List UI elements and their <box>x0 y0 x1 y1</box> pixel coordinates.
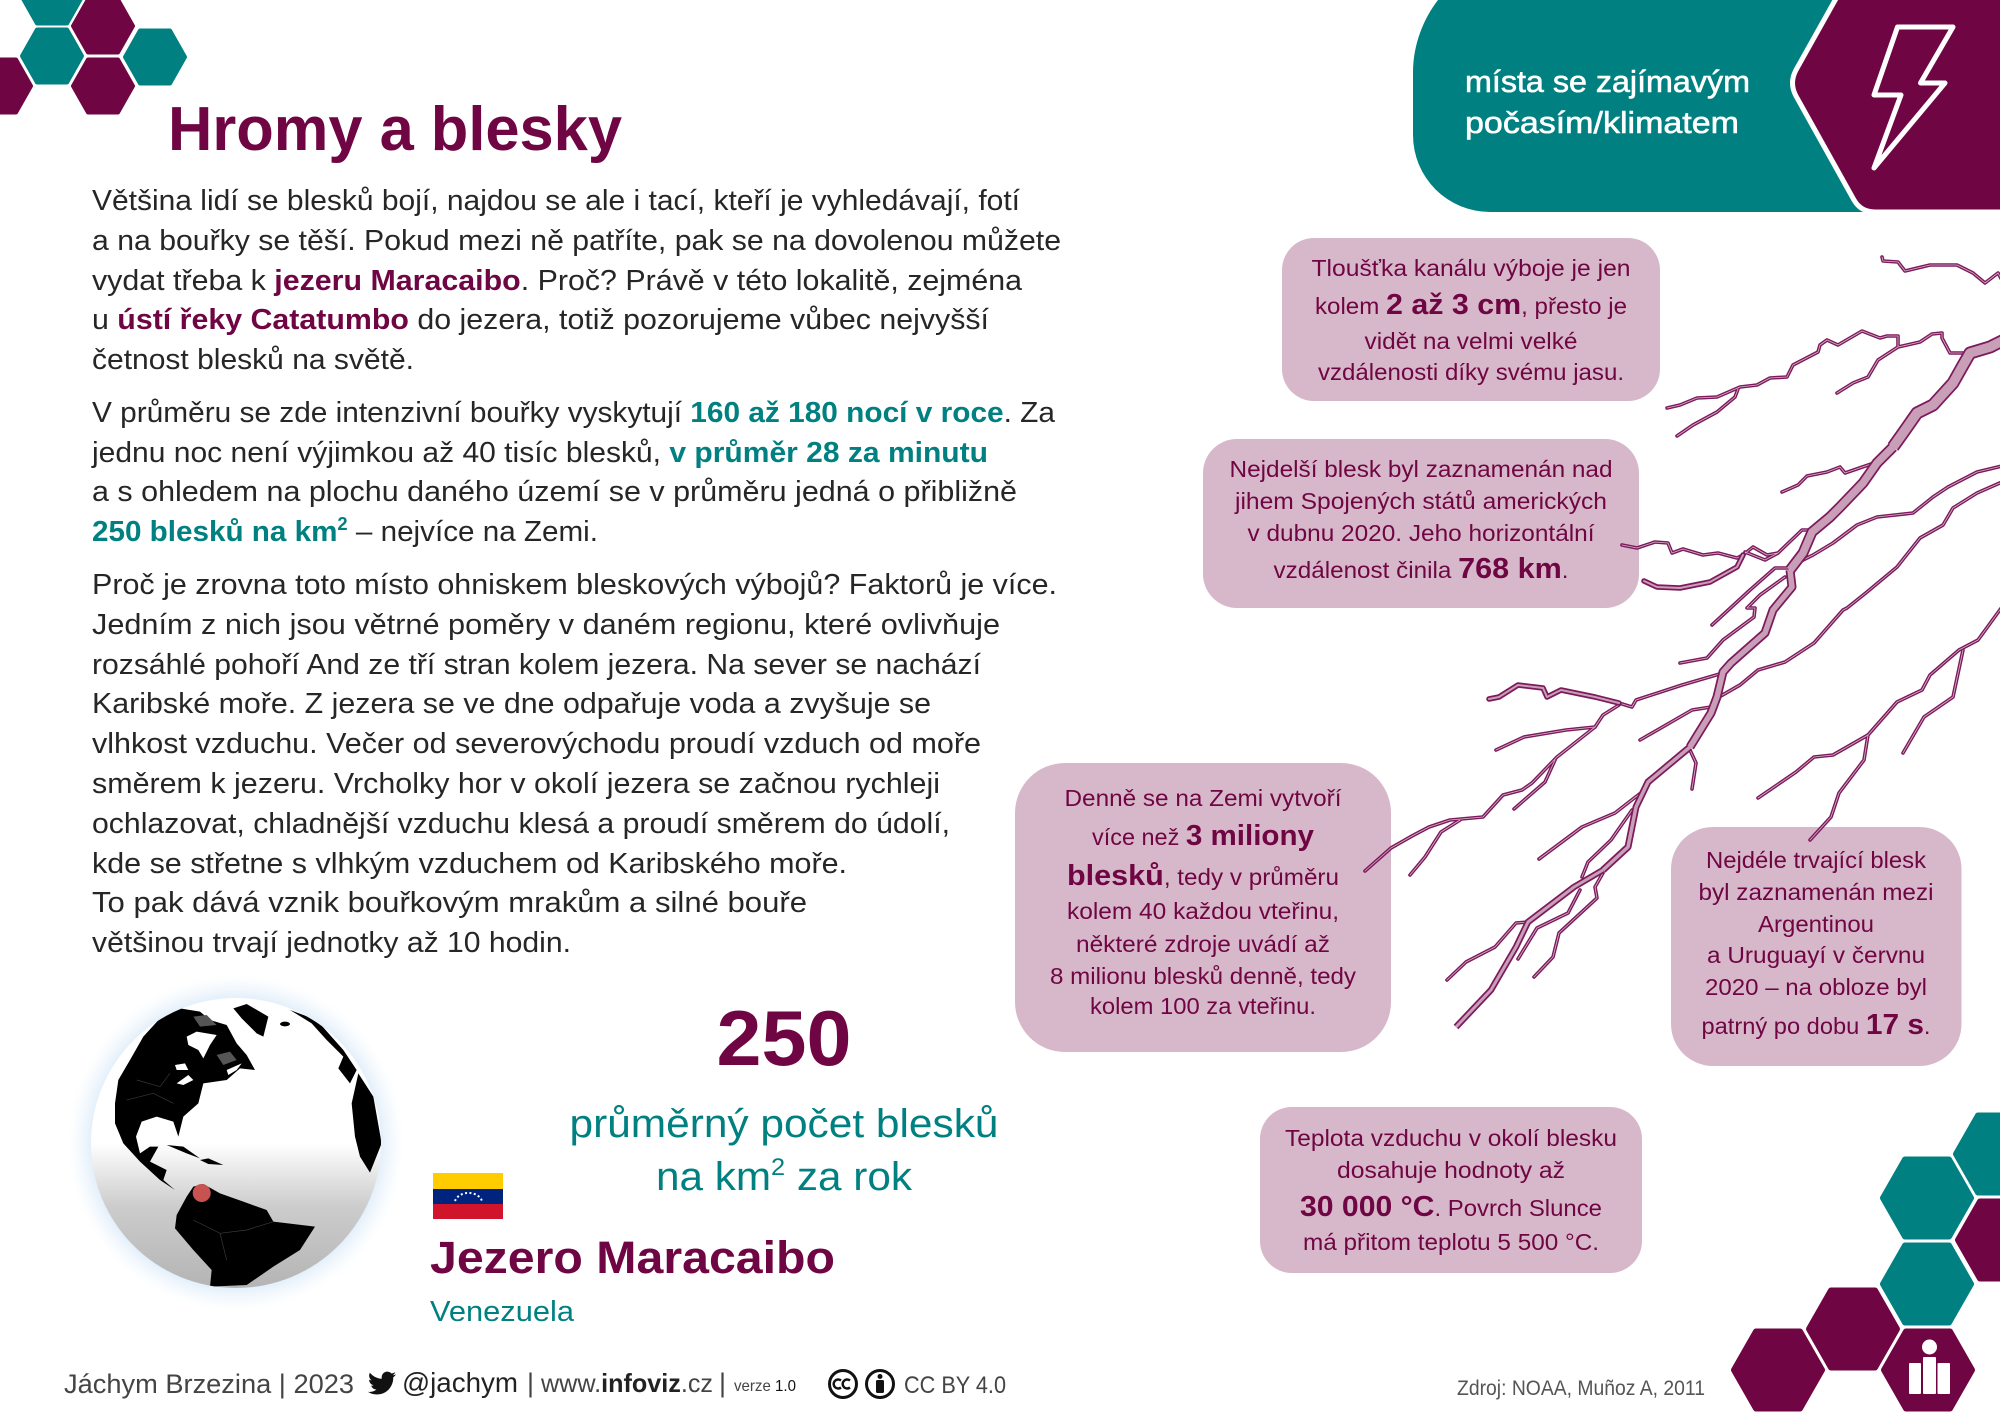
footer: credits: @jachym <box>402 1367 518 1398</box>
text block: intro paragraph: vydat třeba k jezeru Maracaibo . Proč? Právě v této lokalitě, zejména <box>92 265 1023 297</box>
text block: storm statistics paragraph: – nejvíce na Zemi. <box>348 516 598 548</box>
key number caption: 2 <box>771 1154 785 1181</box>
text block: storm statistics paragraph: jednu noc není výjimkou až 40 tisíc blesků, v průměr 28 za minutu <box>91 437 988 469</box>
fact box: daily lightning count: 8 milionu blesků denně, tedy <box>1050 963 1357 989</box>
text block: causes paragraph: Jedním z nich jsou větrné poměry v daném regionu, které ovlivňuje <box>92 609 1000 641</box>
fact box: daily lightning count: Denně se na Zemi vytvoří <box>1064 785 1342 811</box>
fact box: channel thickness: kolem 2 až 3 cm , přesto je <box>1315 289 1627 321</box>
fact box: daily lightning count: více než 3 miliony <box>1092 820 1314 852</box>
footer: credits <box>64 1367 1006 1399</box>
text block: storm statistics paragraph: a s ohledem na plochu daného území se v průměru jedná o přibližně <box>92 476 1017 508</box>
fact box: longest lightning: jihem Spojených států amerických <box>1234 488 1607 514</box>
title: Hromy a blesky <box>168 95 623 164</box>
key number: 250 <box>570 994 998 1199</box>
fact box: channel thickness: Tloušťka kanálu výboje je jen <box>1312 255 1630 281</box>
fact box: temperature: dosahuje hodnoty až <box>1337 1157 1565 1183</box>
icon: Creative Commons CC <box>830 1370 856 1398</box>
fact box: temperature: Teplota vzduchu v okolí blesku <box>1285 1125 1617 1151</box>
fact box: longest duration: 2020 – na obloze byl <box>1705 974 1927 1000</box>
fact box: channel thickness <box>1282 238 1660 401</box>
fact box: daily lightning count: kolem 100 za vteřinu. <box>1090 993 1316 1019</box>
fact box: temperature: 30 000 °C. Povrch Slunce <box>1300 1191 1602 1223</box>
fact box: temperature: má přitom teplotu 5 500 °C. <box>1303 1229 1599 1255</box>
fact box: channel thickness: vidět na velmi velké <box>1364 328 1578 354</box>
fact box: daily lightning count <box>1015 763 1391 1052</box>
text block: causes paragraph: směrem k jezeru. Vrcholky hor v okolí jezera se začnou rychleji <box>92 768 940 800</box>
fact box: longest duration: byl zaznamenán mezi <box>1698 879 1934 905</box>
footer: credits: Jáchym Brzezina | 2023 <box>64 1369 354 1399</box>
category label <box>1465 64 1750 140</box>
fact box: longest duration <box>1671 827 1962 1066</box>
map marker <box>193 1184 211 1202</box>
text block: causes paragraph <box>92 569 1057 959</box>
header banner: category <box>1413 0 2000 212</box>
country name: Venezuela <box>430 1296 575 1328</box>
flag of Venezuela <box>433 1173 503 1219</box>
hexagon with info icon <box>1884 1332 1972 1408</box>
footer: credits: | <box>527 1368 534 1398</box>
text block: intro paragraph: u ústí řeky Catatumbo do jezera, totiž pozorujeme vůbec nejvyšší <box>92 304 989 336</box>
text block: causes paragraph: To pak dává vznik bouřkovým mrakům a silné bouře <box>92 887 807 919</box>
text block: storm statistics paragraph: 250 blesků na km <box>92 516 337 548</box>
text block: causes paragraph: ochlazovat, chladnější vzduchu klesá a proudí směrem do údolí, <box>92 808 950 840</box>
text block: intro paragraph: četnost blesků na světě. <box>92 344 414 376</box>
hexagons: top left decoration <box>0 0 185 112</box>
fact box: longest lightning: Nejdelší blesk byl zaznamenán nad <box>1230 456 1612 482</box>
key number caption <box>570 1102 998 1199</box>
text block: intro paragraph <box>92 185 1061 376</box>
fact box: longest lightning <box>1203 439 1639 608</box>
text block: causes paragraph: rozsáhlé pohoří And ze tří stran kolem jezera. Na sever se nachází <box>92 649 981 681</box>
text block: storm statistics paragraph <box>91 397 1056 548</box>
key number caption: za rok <box>785 1155 913 1199</box>
lightning illustration <box>1365 257 2000 1027</box>
text block: intro paragraph: Většina lidí se blesků bojí, najdou se ale i tací, kteří je vyhledávají, fotí <box>92 185 1020 217</box>
fact box: channel thickness: vzdálenosti díky svému jasu. <box>1318 359 1624 385</box>
fact box: daily lightning count: blesků, tedy v průměru <box>1067 860 1339 892</box>
place name: Jezero Maracaibo <box>430 1232 835 1283</box>
footer: credits: www.infoviz.cz <box>540 1368 713 1398</box>
footer: credits: verze 1.0 <box>734 1378 796 1395</box>
hexagons: bottom right decoration <box>1734 1116 2000 1408</box>
purple hexagon badge <box>1792 0 2000 212</box>
fact box: daily lightning count: kolem 40 každou vteřinu, <box>1067 898 1339 924</box>
source note: Zdroj: NOAA, Muñoz A, 2011 <box>1457 1377 1705 1400</box>
text block: storm statistics paragraph: 2 <box>337 514 348 534</box>
text block: storm statistics paragraph: V průměru se zde intenzivní bouřky vyskytují 160 až 180 nocí v roce . Za <box>92 397 1056 429</box>
globe with Lake Maracaibo marker <box>78 985 394 1302</box>
fact box: longest duration: Nejdéle trvající blesk <box>1706 847 1927 873</box>
fact box: longest duration: a Uruguayí v červnu <box>1707 942 1925 968</box>
icon: Creative Commons BY <box>866 1370 894 1398</box>
text block: causes paragraph: vlhkost vzduchu. Večer od severovýchodu proudí vzduch od moře <box>92 728 981 760</box>
key number caption: na km <box>656 1155 765 1199</box>
fact box: longest duration: patrný po dobu 17 s. <box>1702 1009 1930 1041</box>
text block: intro paragraph: a na bouřky se těší. Pokud mezi ně patříte, pak se na dovolenou můžete <box>92 225 1061 257</box>
category label: místa se zajímavým <box>1465 64 1750 99</box>
category label: počasím/klimatem <box>1465 105 1739 140</box>
text block: causes paragraph: Proč je zrovna toto místo ohniskem bleskových výbojů? Faktorů je více. <box>92 569 1057 601</box>
fact box: longest duration: Argentinou <box>1758 911 1874 937</box>
text block: causes paragraph: Karibské moře. Z jezera se ve dne odpařuje voda a zvyšuje se <box>92 688 931 720</box>
icon: twitter bird <box>368 1372 396 1394</box>
fact box: daily lightning count: některé zdroje uvádí až <box>1076 931 1330 957</box>
fact box: temperature <box>1260 1107 1642 1273</box>
fact box: longest lightning: v dubnu 2020. Jeho horizontální <box>1248 520 1595 546</box>
text block: causes paragraph: kde se střetne s vlhkým vzduchem od Karibského moře. <box>92 848 847 880</box>
key number caption: průměrný počet blesků <box>570 1102 998 1146</box>
footer: credits: CC BY 4.0 <box>904 1372 1006 1399</box>
footer: credits: | <box>719 1368 726 1398</box>
key number: 250: 250 <box>716 994 852 1082</box>
icon: lightning bolt <box>1874 27 1953 168</box>
fact box: longest lightning: vzdálenost činila 768 km. <box>1274 553 1568 585</box>
text block: causes paragraph: většinou trvají jednotky až 10 hodin. <box>92 927 571 959</box>
